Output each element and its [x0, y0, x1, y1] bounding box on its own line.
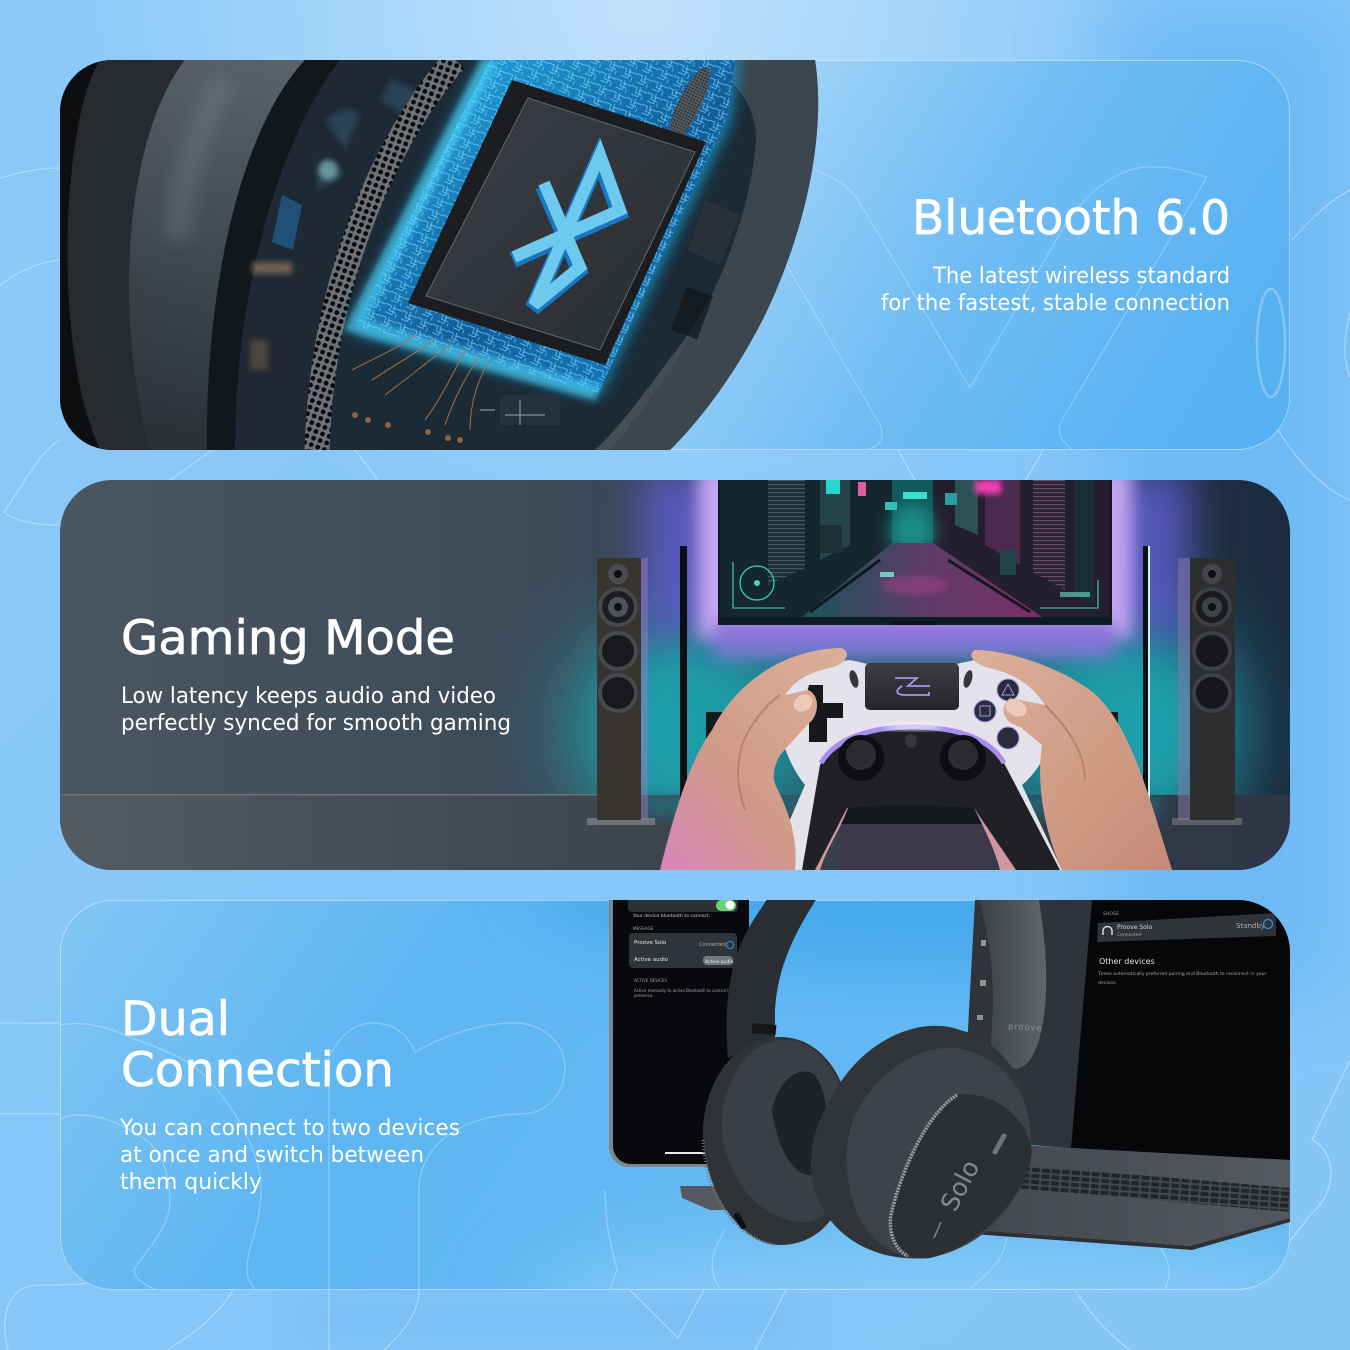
- floor: [60, 795, 1290, 870]
- card background: [60, 790, 1350, 1350]
- laptop device list: devices.: [1098, 980, 1117, 986]
- heading: Gaming Mode: Gaming Mode: [121, 611, 455, 666]
- electronic components: [352, 200, 740, 443]
- card background: [60, 60, 1290, 450]
- touchpad with logo: [865, 663, 959, 710]
- menu buttons: [848, 669, 860, 689]
- image: headphone cutaway with bluetooth chip: [60, 56, 818, 450]
- phone: Your device bluetooth to connect.: [632, 913, 710, 919]
- laptop device list: Proove Solo: [1117, 924, 1152, 931]
- right hand: [971, 650, 1172, 870]
- card outline art: [60, 1023, 1169, 1289]
- text: Gaming Mode description: [121, 684, 511, 736]
- panel: Dual Connection: [60, 790, 1350, 1350]
- phone: Proove Solo: [634, 940, 667, 946]
- headband left: [727, 890, 822, 1058]
- text: Dual Connection description: [119, 1116, 460, 1195]
- circuit board: [305, 60, 766, 450]
- heading: Dual Connection: [121, 992, 394, 1098]
- room scene: [60, 470, 1290, 870]
- text: Bluetooth description: for the fastest, stable connection: [881, 291, 1230, 316]
- perforated speaker strip: [317, 60, 455, 450]
- chip: [408, 80, 706, 365]
- text: Dual Connection description: You can connect to two devices: [119, 1116, 460, 1141]
- game controller: [768, 660, 1062, 870]
- laptop device list: Standby: [1236, 922, 1265, 930]
- white shell: [768, 660, 1062, 870]
- text: Bluetooth description: The latest wireless standard: [932, 264, 1230, 289]
- card background: [60, 480, 1290, 870]
- microphone mesh: [668, 67, 710, 135]
- headphone shell: [60, 60, 818, 450]
- heading: Dual Connection: Connection: [121, 1043, 394, 1098]
- phone: Active audio: [634, 957, 669, 963]
- console box: [706, 712, 1118, 824]
- purple light arc: [821, 727, 1004, 763]
- small stand: [680, 1186, 730, 1210]
- text: Dual Connection description: them quickly: [120, 1170, 262, 1195]
- laptop device list: Times automatically preferred pairing and Bluetooth to reconnect in your: [1097, 971, 1267, 977]
- right speaker: [1172, 558, 1242, 825]
- action buttons: [974, 679, 1019, 749]
- text: Bluetooth description: [881, 264, 1230, 316]
- phone: Active manually to active Bluetooth to control the: [634, 988, 734, 993]
- laptop device list: [977, 911, 1276, 1020]
- bluetooth symbol: [513, 155, 620, 308]
- laptop: [870, 900, 1290, 1250]
- text: Gaming Mode description: perfectly synced for smooth gaming: [121, 711, 511, 736]
- laptop device list: Connected: [1117, 932, 1141, 938]
- outer plate: [890, 1094, 1032, 1258]
- heading: Bluetooth 6.0: Bluetooth 6.0: [912, 191, 1230, 246]
- headphones: [703, 890, 1046, 1258]
- left hand: [660, 648, 847, 870]
- analog sticks: [838, 734, 986, 781]
- right light bar: [1143, 546, 1150, 821]
- laptop device list: SHOGE: [1103, 911, 1119, 917]
- hinge: [975, 1050, 1012, 1085]
- phone: presence.: [634, 993, 654, 998]
- d-pad: [805, 685, 843, 742]
- phone: [609, 880, 749, 1167]
- left speaker: [587, 558, 655, 825]
- image: phone, laptop and Solo headphones: [609, 880, 1290, 1258]
- text: Gaming Mode description: Low latency keeps audio and video: [121, 684, 496, 709]
- heading: Dual Connection: Dual: [121, 992, 230, 1047]
- left light bar: [680, 546, 687, 821]
- glowing blue board: [350, 56, 738, 396]
- lower fingers: [805, 808, 1016, 870]
- headphones: proove: [1008, 1022, 1042, 1034]
- phone: MESSAGE: [633, 926, 654, 931]
- panel: Bluetooth 6.0: [60, 56, 1290, 450]
- phone: ACTIVE DEVICES: [634, 978, 667, 983]
- card outline art: [782, 167, 1285, 449]
- laptop device list: Other devices: [1099, 957, 1155, 966]
- ambient LED glow: [575, 620, 785, 840]
- right ear cup: [811, 1026, 1030, 1258]
- headband right: [977, 895, 1046, 1069]
- panel: Gaming Mode: [60, 470, 1290, 870]
- Solo logo: Solo: [935, 1155, 985, 1216]
- phone: Active audio: [705, 959, 734, 965]
- TV screen: [718, 480, 1112, 625]
- text: Dual Connection description: at once and switch between: [120, 1143, 424, 1168]
- dark grips: [802, 726, 1060, 870]
- left ear cup: [703, 1037, 852, 1245]
- phone: Connected: [699, 942, 726, 948]
